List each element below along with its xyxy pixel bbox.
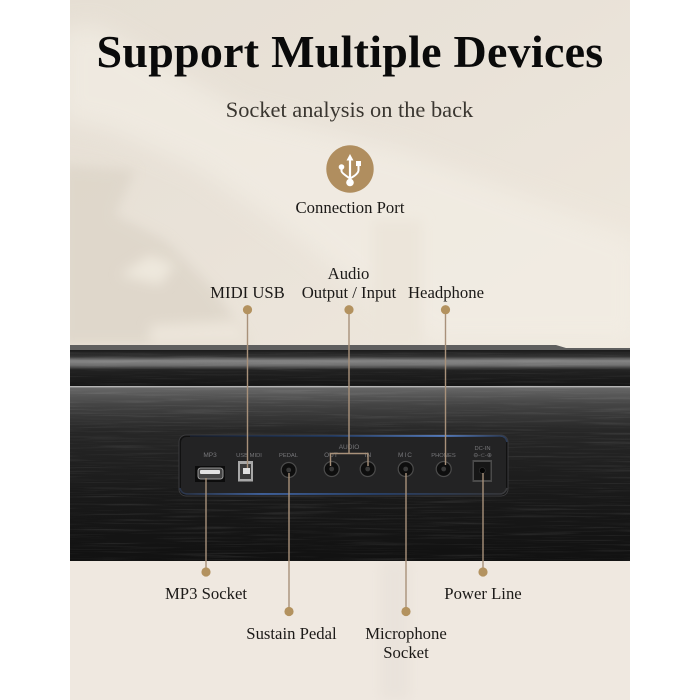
callout: microphone socket: Microphone bbox=[365, 624, 447, 643]
socket panel bbox=[179, 435, 508, 496]
panel labels bbox=[203, 444, 492, 459]
jack: in bbox=[360, 462, 375, 476]
callout: headphone: Headphone bbox=[408, 283, 484, 302]
subtitle: Socket analysis on the back bbox=[226, 97, 474, 122]
panel labels: ⊖-⊂-⊕ bbox=[473, 453, 492, 459]
callout: power line bbox=[444, 473, 522, 603]
callout: MP3 socket bbox=[165, 478, 247, 603]
panel labels: PHONES bbox=[431, 453, 456, 459]
callout: sustain pedal: Sustain Pedal bbox=[246, 624, 337, 643]
jack: pedal bbox=[281, 462, 296, 478]
wood grain bbox=[70, 352, 630, 386]
callout: audio output / input bbox=[302, 264, 397, 466]
callout: MP3 socket: MP3 Socket bbox=[165, 584, 247, 603]
callout: audio output / input: Audio bbox=[328, 264, 369, 283]
label: connection port: Connection Port bbox=[296, 198, 405, 217]
DC power socket bbox=[472, 460, 492, 482]
callout: microphone socket bbox=[365, 473, 447, 662]
piano body bbox=[70, 345, 630, 561]
USB A socket bbox=[195, 466, 225, 482]
icon: USB connection port bbox=[326, 145, 374, 193]
panel labels: IN bbox=[365, 452, 372, 459]
rail bbox=[70, 350, 630, 386]
panel labels: PEDAL bbox=[279, 453, 299, 459]
callout: microphone socket: Socket bbox=[383, 643, 429, 662]
callout: power line: Power Line bbox=[444, 584, 522, 603]
background wall with soft shadows bbox=[60, 0, 640, 350]
front panel bbox=[70, 387, 630, 561]
panel labels: MIC bbox=[398, 452, 413, 459]
callout: sustain pedal bbox=[246, 473, 337, 643]
panel labels: DC-IN bbox=[474, 446, 491, 452]
panel labels: MP3 bbox=[203, 452, 217, 459]
callout: audio output / input: Output / Input bbox=[302, 283, 397, 302]
bottom floor area bbox=[70, 561, 630, 700]
panel labels: OUT bbox=[324, 452, 338, 459]
callout: MIDI USB bbox=[210, 283, 285, 468]
callout: MIDI USB: MIDI USB bbox=[210, 283, 285, 302]
top edge with notch bbox=[70, 345, 630, 351]
jack: phones bbox=[436, 462, 451, 476]
USB B socket bbox=[238, 461, 253, 482]
jack: mic bbox=[398, 462, 413, 476]
callout: headphone bbox=[408, 283, 484, 465]
panel labels: USB MIDI bbox=[236, 453, 262, 459]
jack: out bbox=[324, 462, 339, 476]
panel labels: AUDIO bbox=[339, 444, 359, 451]
title: Support Multiple Devices bbox=[97, 26, 603, 77]
